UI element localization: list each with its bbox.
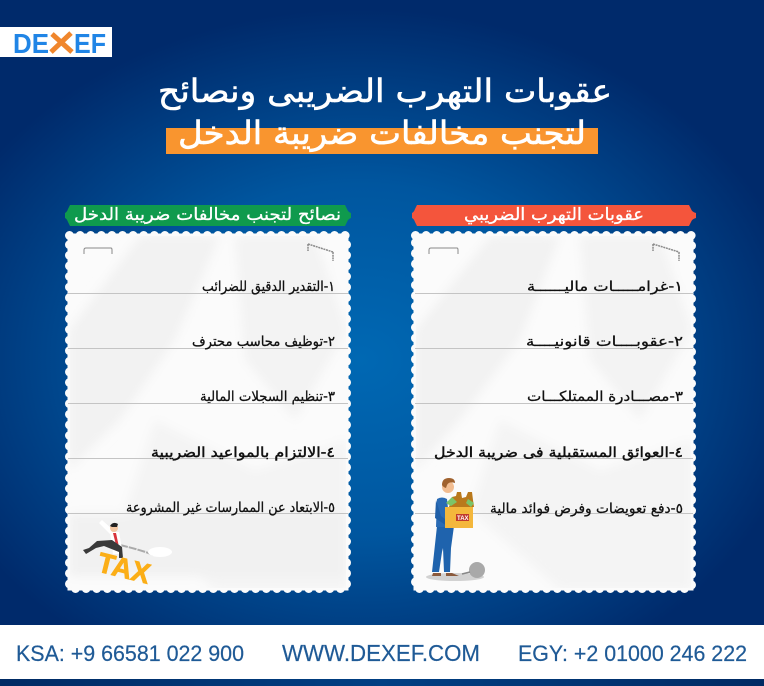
footer band [0,625,764,686]
item 2: ٢-عقوبــــات قانونيــــة [526,334,683,350]
ribbon: penalties heading [412,205,696,226]
item 2: ٢-توظيف محاسب محترف [192,334,335,350]
item 5: ٥-دفع تعويضات وفرض فوائد مالية [490,501,683,517]
item 3: ٣-تنظيم السجلات المالية [200,389,335,405]
title [158,72,612,154]
ribbon: penalties heading: عقوبات التهرب الضريبي [464,205,644,225]
logo: DE [13,28,49,59]
title line 2: لتجنب مخالفات ضريبة الدخل [178,114,586,152]
logo: EF [74,28,106,59]
footer: website: WWW.DEXEF.COM [282,640,480,666]
item 1: ١-التقدير الدقيق للضرائب [202,279,335,295]
item 5: ٥-الابتعاد عن الممارسات غير المشروعة [126,500,335,516]
title line 1: عقوبات التهرب الضريبى ونصائح [158,72,612,110]
logo [0,27,112,59]
paper clips [84,244,333,261]
ribbon: tips heading: نصائح لتجنب مخالفات ضريبة الدخل [74,205,341,225]
divider lines [415,294,693,514]
panel: penalties [415,236,693,590]
title highlight bar [166,128,598,154]
footer: KSA phone: KSA: +9 66581 022 900 [16,641,244,666]
divider lines [68,294,348,514]
icon: running man over tax letters: TAX [95,547,154,590]
item 4: ٤-الالتزام بالمواعيد الضريبية [151,445,335,461]
icon: man carrying tax box with ball and chain: TAX [457,516,469,522]
icon: man carrying tax box with ball and chain [426,478,485,581]
paper clips [429,244,679,261]
icon: running man over tax letters [83,520,172,590]
footer: EGY phone: EGY: +2 01000 246 222 [518,641,747,666]
paper sheet [415,236,692,590]
item 3: ٣-مصـــادرة الممتلكـــات [527,389,684,405]
panel: tips [68,236,348,590]
paper sheet [69,236,347,590]
item 4: ٤-العوائق المستقبلية فى ضريبة الدخل [434,445,683,461]
item 1: ١-غرامـــــات ماليــــــة [527,279,683,295]
